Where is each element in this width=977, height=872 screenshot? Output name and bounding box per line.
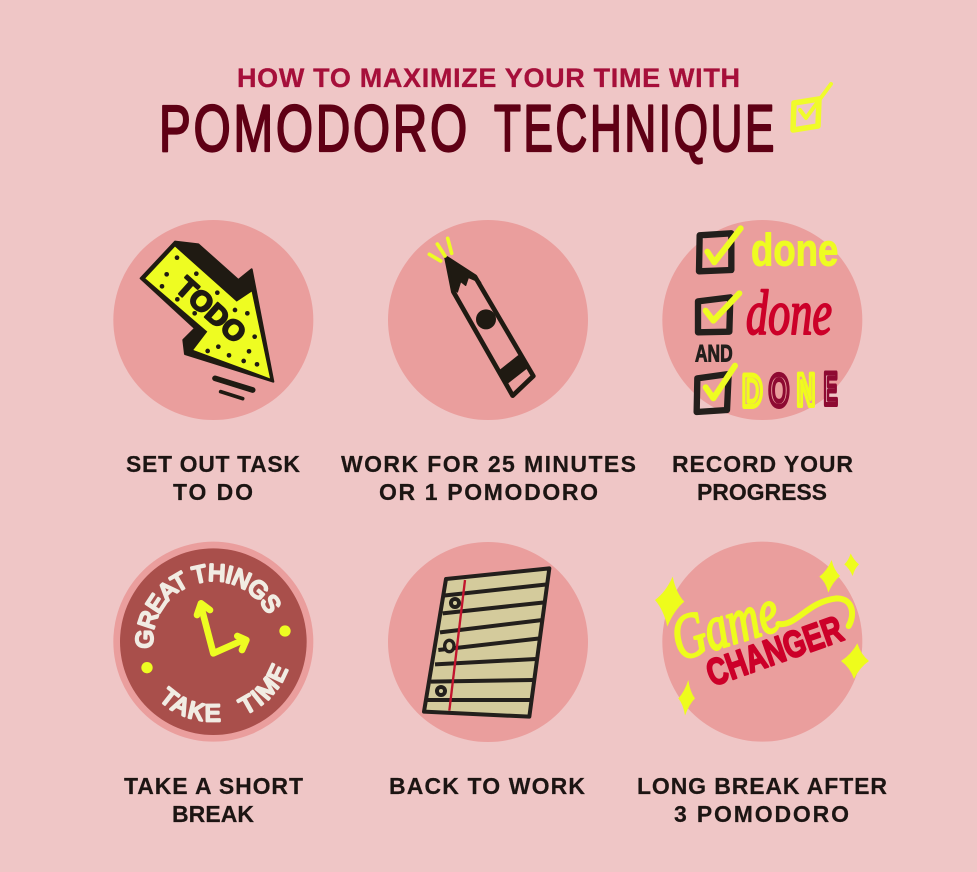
label: take a short break: TAKE A SHORT [124, 773, 303, 799]
icon: done checklist: O [769, 365, 789, 416]
title: POMODORO [159, 91, 470, 165]
circle background [388, 220, 588, 420]
label: work for 25 minutes: WORK FOR 25 MINUTES [341, 451, 636, 477]
label: set out task [126, 451, 300, 505]
label: take a short break [124, 773, 303, 827]
label: set out task: TO DO [173, 479, 253, 505]
icon: notebook paper [424, 568, 549, 717]
icon: done checklist: AND [695, 341, 733, 368]
icon: done checklist: D [742, 366, 763, 417]
icon: to do arrow [113, 220, 313, 420]
panel: take a short break [113, 542, 314, 827]
panel: back to work [388, 542, 588, 799]
icon: clock badge: TAKE TIME [162, 662, 289, 722]
title: TECHNIQUE [494, 91, 777, 165]
label: record your progress [672, 451, 853, 505]
icon: clock badge [113, 542, 314, 742]
title [159, 91, 777, 165]
icon: done checklist: E [824, 364, 838, 415]
label: work for 25 minutes: OR 1 POMODORO [379, 479, 598, 505]
icon: game changer [655, 542, 869, 742]
label: back to work: BACK TO WORK [389, 773, 585, 799]
label: take a short break: BREAK [172, 801, 254, 827]
label: set out task: SET OUT TASK [126, 451, 300, 477]
label: long break: 3 POMODORO [674, 801, 849, 827]
label: long break: LONG BREAK AFTER [637, 773, 887, 799]
icon: game changer: CHANGER [701, 607, 848, 694]
icon: done checklist: done [746, 278, 832, 348]
label: record your progress: RECORD YOUR [672, 451, 853, 477]
panel: record your progress [662, 220, 862, 505]
icon: done checklist [662, 220, 862, 420]
icon: done checklist: N [797, 364, 815, 415]
icon: clock badge: GREAT THINGS [134, 563, 281, 648]
icon: game changer: Game [663, 575, 787, 674]
label: long break [637, 773, 887, 827]
icon: to do arrow: TODO [170, 271, 252, 349]
label: record your progress: PROGRESS [697, 479, 827, 505]
panel: work for 25 minutes [341, 220, 636, 505]
panel: long break [637, 542, 887, 827]
icon: pencil [429, 238, 533, 396]
subtitle: HOW TO MAXIMIZE YOUR TIME WITH [237, 63, 740, 93]
panel: set out task [113, 220, 313, 505]
icon: title checkbox [793, 84, 831, 130]
label: work for 25 minutes [341, 451, 636, 505]
icon: done checklist: done [751, 224, 838, 275]
circle background [388, 542, 588, 742]
